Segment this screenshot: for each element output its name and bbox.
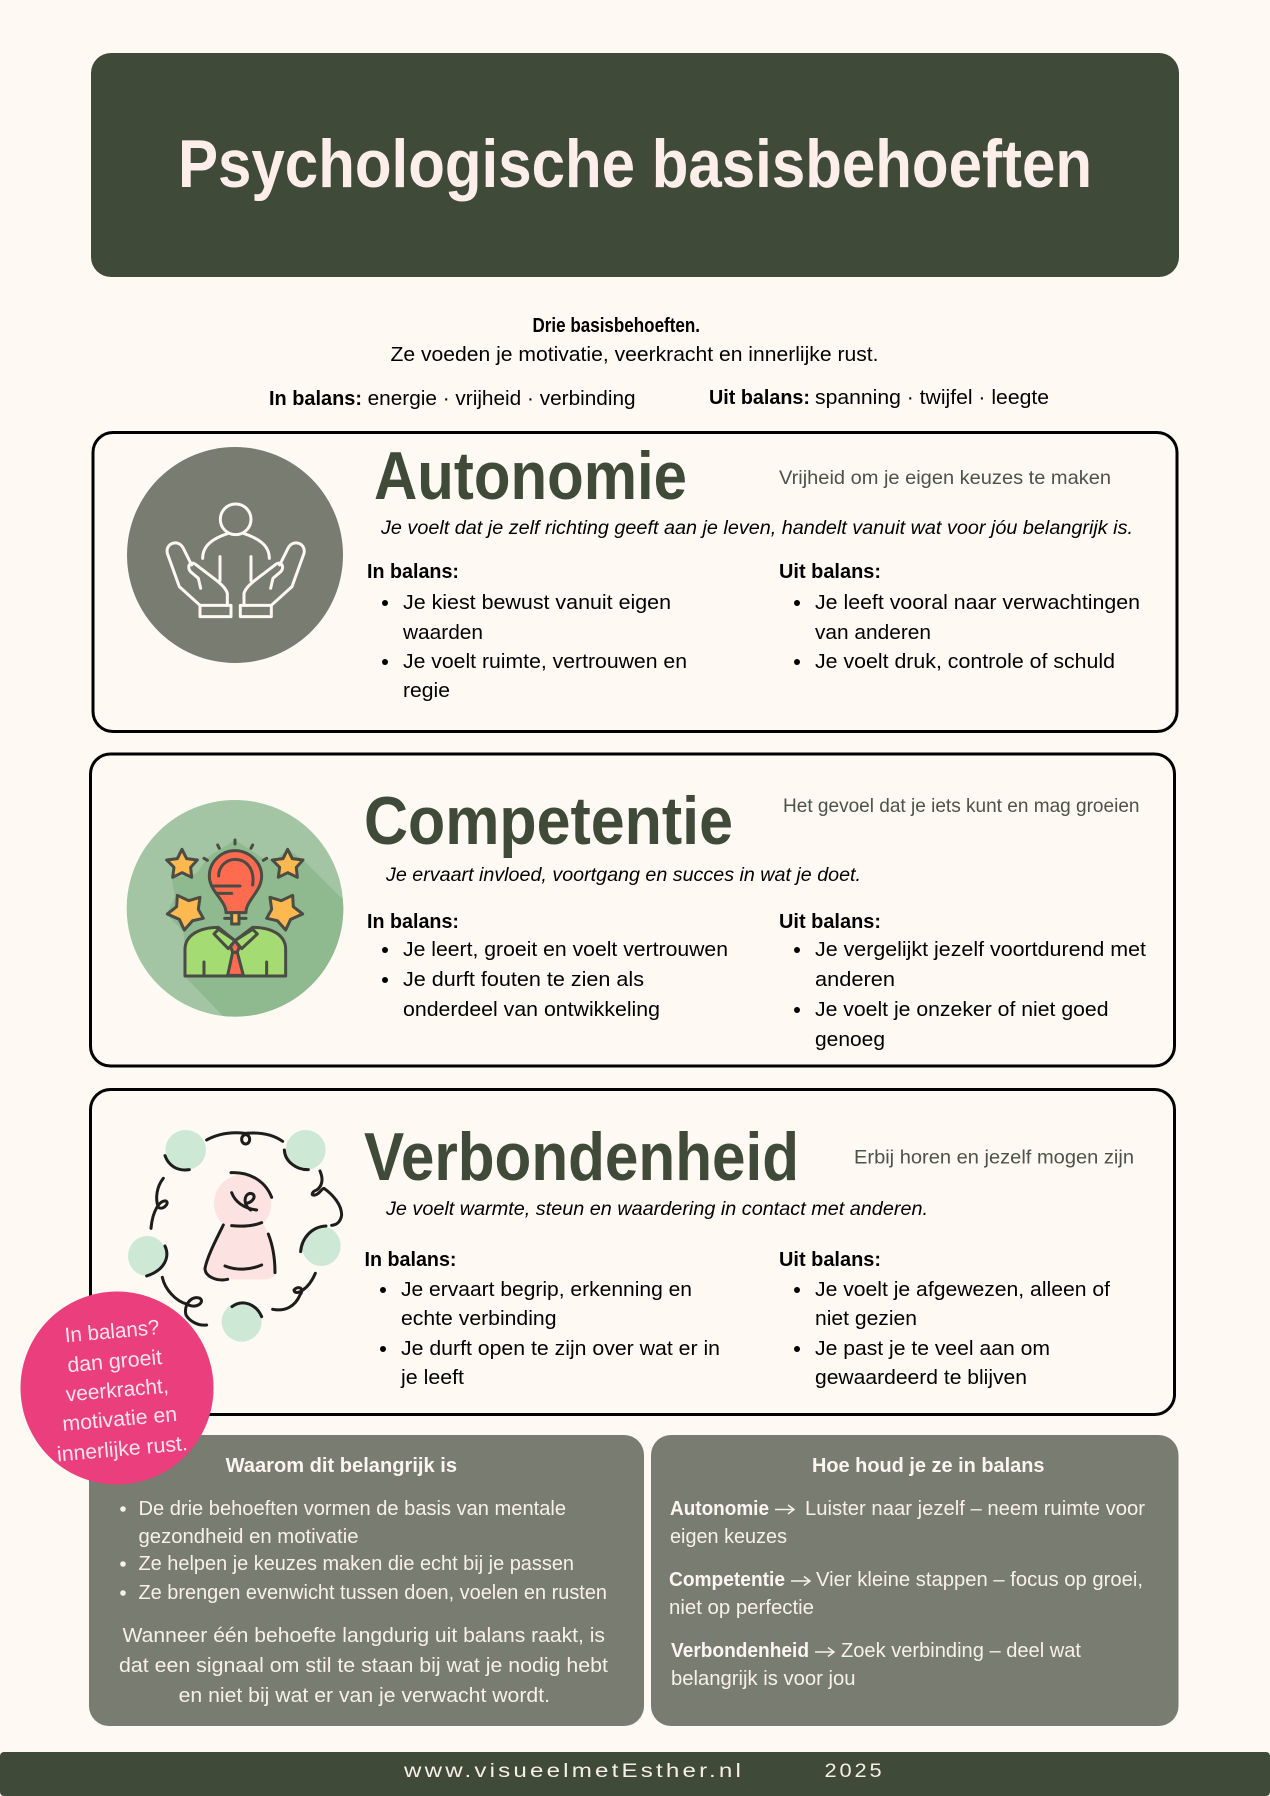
list: uit balans: Uit balans: [779,1248,881,1271]
list: uit balans [779,1248,1110,1389]
title banner: Psychologische basisbehoeften [178,126,1092,202]
subtitle: Het gevoel dat je iets kunt en mag groeien [783,795,1140,817]
tip: autonomie: eigen keuzes [670,1525,787,1548]
list: in balans: Je ervaart begrip, erkenning en [401,1278,692,1301]
list: in balans: je leeft [400,1366,464,1389]
bullet list: Ze helpen je keuzes maken die echt bij je passen [138,1552,574,1575]
subtitle: Erbij horen en jezelf mogen zijn [854,1146,1134,1168]
list: in balans [364,1248,720,1389]
tip: verbondenheid: Verbondenheid [671,1639,809,1662]
tip: autonomie: Autonomie [670,1497,769,1520]
callout: in balans badge: innerlijke rust. [56,1432,189,1466]
list: in balans: In balans: [364,1248,456,1271]
closing paragraph [119,1624,608,1707]
panel: Autonomie [93,432,1177,732]
panel heading: Waarom dit belangrijk is [226,1454,457,1477]
closing paragraph: dat een signaal om stil te staan bij wat je nodig hebt [119,1654,608,1677]
list: uit balans: gewaardeerd te blijven [815,1366,1027,1389]
callout: in balans badge: In balans? [64,1316,160,1347]
callout: in balans badge [20,1292,214,1484]
footer bar: 2025 [824,1761,884,1782]
intro text: spanning · twijfel · leegte [815,386,1049,409]
list: in balans [367,910,728,1021]
list: uit balans: Je past je te veel aan om [815,1337,1050,1360]
callout: in balans badge: motivatie en [61,1403,178,1436]
description: Je voelt dat je zelf richting geeft aan je leven, handelt vanuit wat voor jóu belangrijk is. [380,517,1133,539]
footer bar: www.visueelmetEsther.nl [403,1761,744,1782]
list: uit balans: Uit balans: [779,560,881,583]
intro text [269,314,1049,410]
title banner [91,53,1179,277]
list: in balans [367,560,687,702]
list: uit balans [779,560,1140,673]
list: in balans: Je voelt ruimte, vertrouwen en [403,650,687,673]
list: uit balans: Je vergelijkt jezelf voortdurend met [815,938,1146,961]
bullet list: De drie behoeften vormen de basis van mentale [138,1497,566,1520]
panel: hoe houd je ze in balans [651,1435,1178,1726]
panel: Verbondenheid [90,1090,1174,1414]
list: in balans: In balans: [367,560,459,583]
icon: person held in open hands [127,447,343,663]
list: uit balans: van anderen [815,621,931,644]
subtitle: Vrijheid om je eigen keuzes te maken [779,467,1111,489]
intro text: Ze voeden je motivatie, veerkracht en innerlijke rust. [390,343,878,366]
list: in balans: onderdeel van ontwikkeling [403,998,660,1021]
icon: light bulb with stars above shirt [127,800,350,1023]
list: uit balans: Je voelt druk, controle of schuld [815,650,1115,673]
list: uit balans: Je voelt je onzeker of niet goed [815,998,1108,1021]
bullet list [120,1497,607,1604]
list: in balans: In balans: [367,910,459,933]
list: in balans: Je leert, groeit en voelt vertrouwen [403,938,728,961]
tip: autonomie: Luister naar jezelf – neem ruimte voor [805,1497,1145,1520]
tip: competentie: Competentie [669,1568,785,1591]
intro text: In balans: [269,387,362,410]
list: in balans: Je durft open te zijn over wat er in [401,1337,720,1360]
intro text: Drie basisbehoeften. [532,314,700,337]
footer bar [0,1752,1270,1796]
bullet list: gezondheid en motivatie [138,1525,358,1548]
list: uit balans [779,910,1146,1051]
intro text: Uit balans: [709,386,810,409]
heading: Verbondenheid: Verbondenheid [364,1119,799,1195]
tip: competentie [669,1568,1143,1619]
tip: verbondenheid: Zoek verbinding – deel wat [841,1639,1081,1662]
closing paragraph: en niet bij wat er van je verwacht wordt. [179,1684,550,1707]
list: uit balans: anderen [815,968,895,991]
callout: in balans badge: dan groeit [66,1346,163,1377]
closing paragraph: Wanneer één behoefte langdurig uit balans raakt, is [122,1624,605,1647]
icon: person in circle of connected dots [128,1130,342,1342]
tip: verbondenheid: belangrijk is voor jou [671,1667,856,1690]
description: Je ervaart invloed, voortgang en succes in wat je doet. [385,864,861,886]
bullet list: Ze brengen evenwicht tussen doen, voelen en rusten [138,1581,607,1604]
panel: waarom dit belangrijk is [89,1435,644,1726]
list: in balans: echte verbinding [401,1307,556,1330]
description: Je voelt warmte, steun en waardering in contact met anderen. [385,1198,928,1220]
list: uit balans: genoeg [815,1028,885,1051]
list: uit balans: Je leeft vooral naar verwachtingen [815,591,1140,614]
panel: Competentie [90,754,1174,1066]
tip: verbondenheid [671,1639,1081,1690]
tip: competentie: niet op perfectie [669,1596,814,1619]
callout: in balans badge: veerkracht, [65,1375,170,1406]
list: in balans: Je durft fouten te zien als [403,968,644,991]
list: in balans: regie [403,679,450,702]
panel heading: Hoe houd je ze in balans [812,1454,1044,1477]
intro text: energie · vrijheid · verbinding [368,387,636,410]
tip: competentie: Vier kleine stappen – focus op groei, [816,1568,1143,1591]
list: uit balans: Uit balans: [779,910,881,933]
tip: autonomie [670,1497,1145,1548]
heading: Autonomie: Autonomie [374,438,687,514]
list: uit balans: niet gezien [815,1307,917,1330]
list: in balans: Je kiest bewust vanuit eigen [403,591,671,614]
list: uit balans: Je voelt je afgewezen, alleen of [815,1278,1110,1301]
list: in balans: waarden [402,621,483,644]
heading: Competentie: Competentie [364,783,733,859]
